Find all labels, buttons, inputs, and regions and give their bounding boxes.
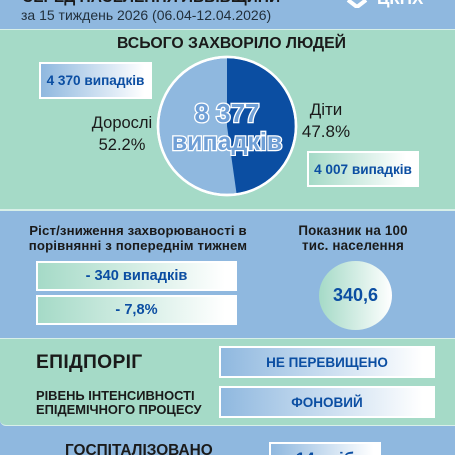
heading: rate: тис. населення <box>302 238 404 252</box>
intensity box: ФОНОВИЙ <box>291 394 363 410</box>
panel: weekly change <box>0 211 455 338</box>
adults case box: 4 370 випадків <box>47 73 144 88</box>
label: children <box>302 100 350 141</box>
label: children: 47.8% <box>302 122 350 141</box>
panel: total cases <box>0 29 455 211</box>
heading: change <box>29 223 247 252</box>
change box: cases <box>36 261 237 291</box>
threshold box <box>219 346 435 378</box>
heading: change: порівнянні з попереднім тижнем <box>29 238 247 252</box>
pie centre number: 8 377 <box>194 98 260 128</box>
pie centre number <box>172 98 283 156</box>
label: adults <box>92 114 152 154</box>
rate circle: 340,6 <box>333 285 378 305</box>
change box: percent: - 7,8% <box>115 302 158 318</box>
threshold box: НЕ ПЕРЕВИЩЕНО <box>266 354 388 370</box>
header band <box>0 0 455 29</box>
pie centre number: випадків <box>172 128 282 156</box>
intensity box <box>219 386 435 418</box>
change box: cases: - 340 випадків <box>86 268 187 284</box>
label: intensity: ЕПІДЕМІЧНОГО ПРОЦЕСУ <box>36 402 202 417</box>
label: adults: 52.2% <box>99 136 145 154</box>
icon: logo <box>346 0 368 8</box>
subtitle: за 15 тиждень 2026 (06.04-12.04.2026) <box>21 7 271 23</box>
adults case box <box>39 62 152 99</box>
change box: percent <box>36 295 237 325</box>
heading: rate <box>298 223 408 252</box>
children case box: 4 007 випадків <box>314 162 412 176</box>
heading: total: ВСЬОГО ЗАХВОРІЛО ЛЮДЕЙ <box>117 35 346 52</box>
heading: rate: Показник на 100 <box>298 223 408 238</box>
label: adults: Дорослі <box>92 114 152 132</box>
label: intensity: РІВЕНЬ ІНТЕНСИВНОСТІ <box>36 388 195 403</box>
children case box <box>307 151 419 187</box>
heading: change: Ріст/зниження захворюваності в <box>29 223 247 238</box>
hospitalised box <box>269 442 381 455</box>
label: threshold: ЕПІДПОРІГ <box>36 352 143 373</box>
rate circle <box>319 261 392 330</box>
label: intensity <box>36 388 202 417</box>
pie chart <box>156 56 298 196</box>
label: children: Діти <box>310 100 342 119</box>
panel: epidemic status <box>0 338 455 426</box>
